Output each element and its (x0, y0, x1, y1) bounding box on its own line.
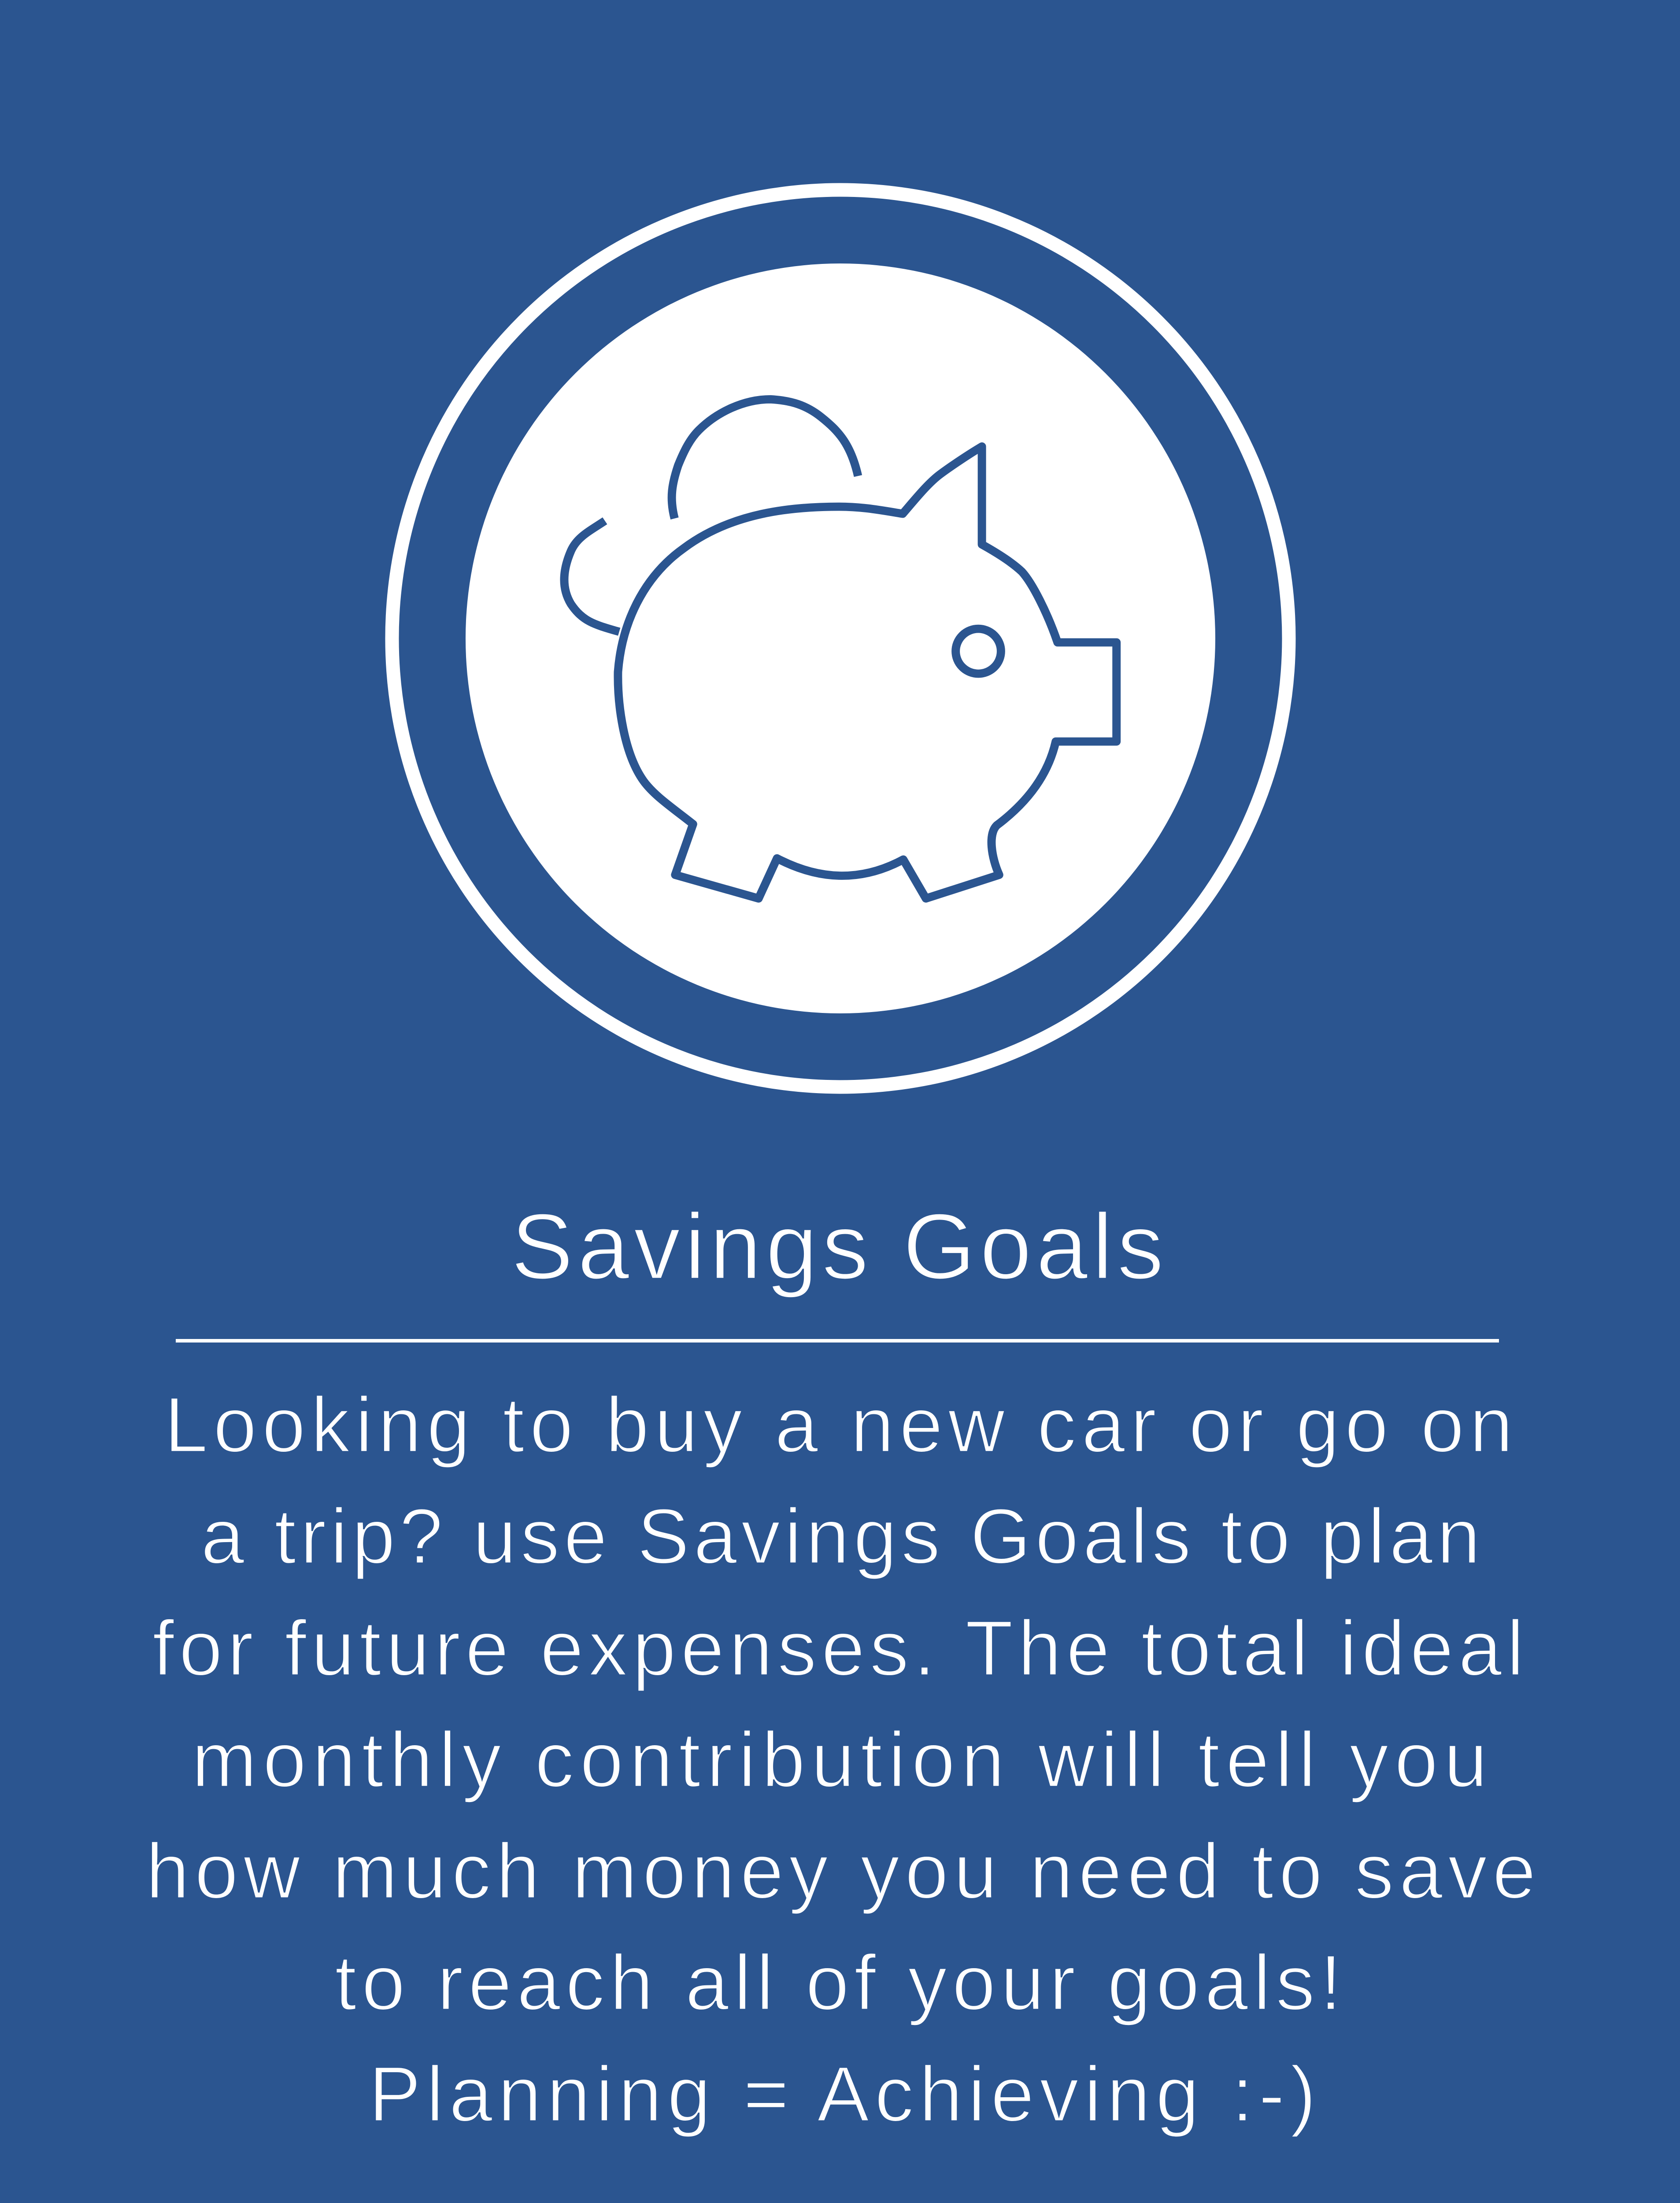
divider under title (176, 1339, 1499, 1343)
pig eye (956, 629, 1001, 674)
outer white ring (392, 190, 1289, 1087)
pig tail (564, 521, 619, 632)
text block: description: monthly contribution will tell you (192, 1716, 1488, 1803)
icon: piggy bank badge (392, 190, 1289, 1087)
text block: description: a trip? use Savings Goals to plan (201, 1492, 1480, 1580)
text block: description: Planning = Achieving :-) (369, 2050, 1316, 2138)
inner white disc (466, 263, 1215, 1013)
text block: description: to reach all of your goals! (335, 1939, 1342, 2026)
text block: description: Looking to buy a new car or go on (164, 1381, 1513, 1469)
coin arc (672, 399, 858, 519)
text block: description: for future expenses. The total ideal (152, 1604, 1524, 1692)
pig body (618, 446, 1117, 898)
text block: description: how much money you need to save (146, 1827, 1536, 1915)
text block: description (146, 1381, 1536, 2138)
title: Savings Goals (511, 1194, 1164, 1298)
icon: piggy bank outline (564, 399, 1117, 898)
